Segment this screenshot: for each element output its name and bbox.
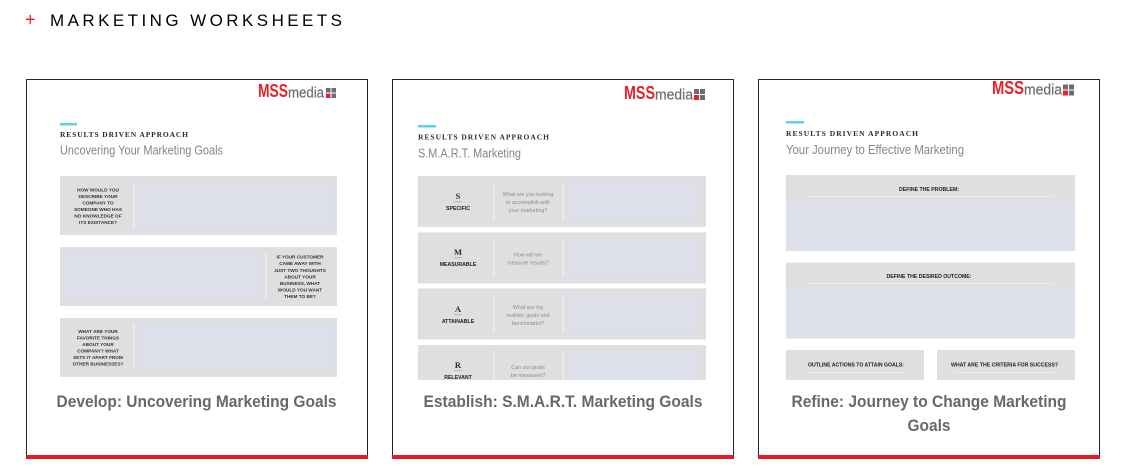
- logo: MSSmedia: media: [655, 86, 694, 104]
- row: company description: SOMEONE WHO HAS: [74, 207, 122, 212]
- row: attainable: ATTAINABLE: [442, 319, 475, 325]
- section heading: MARKETING WORKSHEETS: [50, 11, 342, 30]
- row: favorite things: [60, 318, 337, 377]
- worksheet preview: uncovering goals: [60, 81, 337, 377]
- row: favorite things: ABOUT YOUR: [82, 342, 114, 347]
- row: company description: DESCRIBE YOUR: [79, 194, 118, 199]
- row: company description: [60, 176, 337, 235]
- worksheet preview: journey to effective marketing: Your Journey to Effective Marketing: [786, 143, 964, 157]
- logo: MSSmedia: MSS: [992, 78, 1024, 98]
- row: specific: your marketing?: [509, 208, 547, 214]
- worksheet preview: uncovering goals: Uncovering Your Marketing Goals: [60, 144, 223, 158]
- caption: refine: Refine: Journey to Change Marketing: [792, 392, 1066, 411]
- box: outline actions: OUTLINE ACTIONS TO ATTAIN GOALS:: [808, 362, 904, 368]
- row: two thoughts: JUST TWO THOUGHTS: [274, 268, 326, 273]
- row: measurable: M: [454, 247, 462, 257]
- row: specific: [418, 176, 706, 227]
- box: outline actions: [786, 350, 924, 380]
- row: favorite things: COMPANY? WHAT: [77, 349, 119, 354]
- row: measurable: [418, 232, 706, 284]
- panel: refine worksheet card: [758, 78, 1100, 459]
- row: two thoughts: WOULD YOU WANT: [278, 288, 322, 292]
- row: specific: SPECIFIC: [446, 206, 470, 212]
- row: company description: HOW WOULD YOU: [77, 188, 120, 192]
- box: define the desired outcome: [786, 262, 1075, 338]
- caption: refine: Goals: [908, 416, 950, 435]
- logo: MSSmedia: MSS: [258, 81, 288, 101]
- box: define the problem: [786, 175, 1075, 251]
- worksheet preview: journey to effective marketing: RESULTS DRIVEN APPROACH: [786, 129, 918, 138]
- row: specific: What are you looking: [503, 192, 553, 198]
- row: company description: NO KNOWLEDGE OF: [74, 214, 122, 218]
- logo: MSSmedia: media: [288, 84, 325, 102]
- row: two thoughts: THEM TO BE?: [284, 294, 316, 299]
- panel: develop worksheet card: [26, 80, 368, 459]
- row: attainable: [418, 288, 706, 340]
- row: measurable: measure results?: [507, 260, 549, 266]
- row: company description: ITS EXISTANCE?: [79, 220, 117, 225]
- row: two thoughts: ABOUT YOUR: [284, 274, 316, 279]
- row: relevant: Can our goals: [511, 365, 545, 371]
- row: two thoughts: BUSINESS, WHAT: [280, 281, 320, 286]
- box: criteria for success: WHAT ARE THE CRITERIA FOR SUCCESS?: [951, 362, 1058, 368]
- logo: MSSmedia: [624, 83, 705, 104]
- row: favorite things: SETS IT APART FROM: [73, 355, 123, 360]
- row: two thoughts: CAME AWAY WITH: [279, 261, 321, 266]
- worksheet preview: smart marketing: S.M.A.R.T. Marketing: [418, 146, 521, 160]
- row: two thoughts: IF YOUR CUSTOMER: [277, 254, 324, 260]
- row: relevant: [418, 345, 706, 380]
- box: define the desired outcome: DEFINE THE DESIRED OUTCOME:: [886, 274, 972, 280]
- worksheet preview: uncovering goals: RESULTS DRIVEN APPROACH: [60, 130, 188, 139]
- row: measurable: MEASURABLE: [440, 262, 477, 268]
- logo: MSSmedia: [992, 78, 1074, 98]
- row: two thoughts: [60, 247, 337, 306]
- worksheet preview: smart marketing: RESULTS DRIVEN APPROACH: [418, 132, 549, 142]
- row: attainable: What are my: [513, 305, 544, 311]
- row: relevant: RELEVANT: [444, 375, 473, 381]
- box: define the problem: DEFINE THE PROBLEM:: [899, 187, 959, 193]
- row: specific: to accomplish with: [506, 200, 550, 206]
- logo: MSSmedia: [258, 81, 336, 102]
- row: specific: S: [456, 191, 461, 201]
- row: attainable: realistic goals and: [506, 313, 550, 319]
- row: company description: COMPANY TO: [82, 200, 114, 206]
- row: attainable: A: [455, 304, 462, 314]
- row: relevant: be measured?: [511, 373, 545, 379]
- caption: develop: Develop: Uncovering Marketing Goals: [56, 392, 336, 411]
- row: attainable: benchmarks?: [512, 321, 544, 327]
- logo: MSSmedia: MSS: [624, 83, 655, 103]
- box: criteria for success: [937, 350, 1075, 380]
- row: measurable: How will we: [514, 252, 542, 258]
- logo: MSSmedia: media: [1024, 82, 1063, 98]
- row: favorite things: WHAT ARE YOUR: [78, 329, 118, 334]
- worksheet preview: journey to effective marketing: [786, 78, 1075, 380]
- row: favorite things: FAVORITE THINGS: [77, 336, 119, 341]
- section heading: +: [25, 10, 36, 30]
- worksheet preview: smart marketing: [418, 83, 706, 396]
- caption: establish: Establish: S.M.A.R.T. Marketing Goals: [424, 392, 702, 411]
- row: favorite things: OTHER BUSINESSES?: [73, 362, 124, 367]
- row: relevant: R: [455, 360, 462, 370]
- panel: establish worksheet card: [392, 80, 734, 459]
